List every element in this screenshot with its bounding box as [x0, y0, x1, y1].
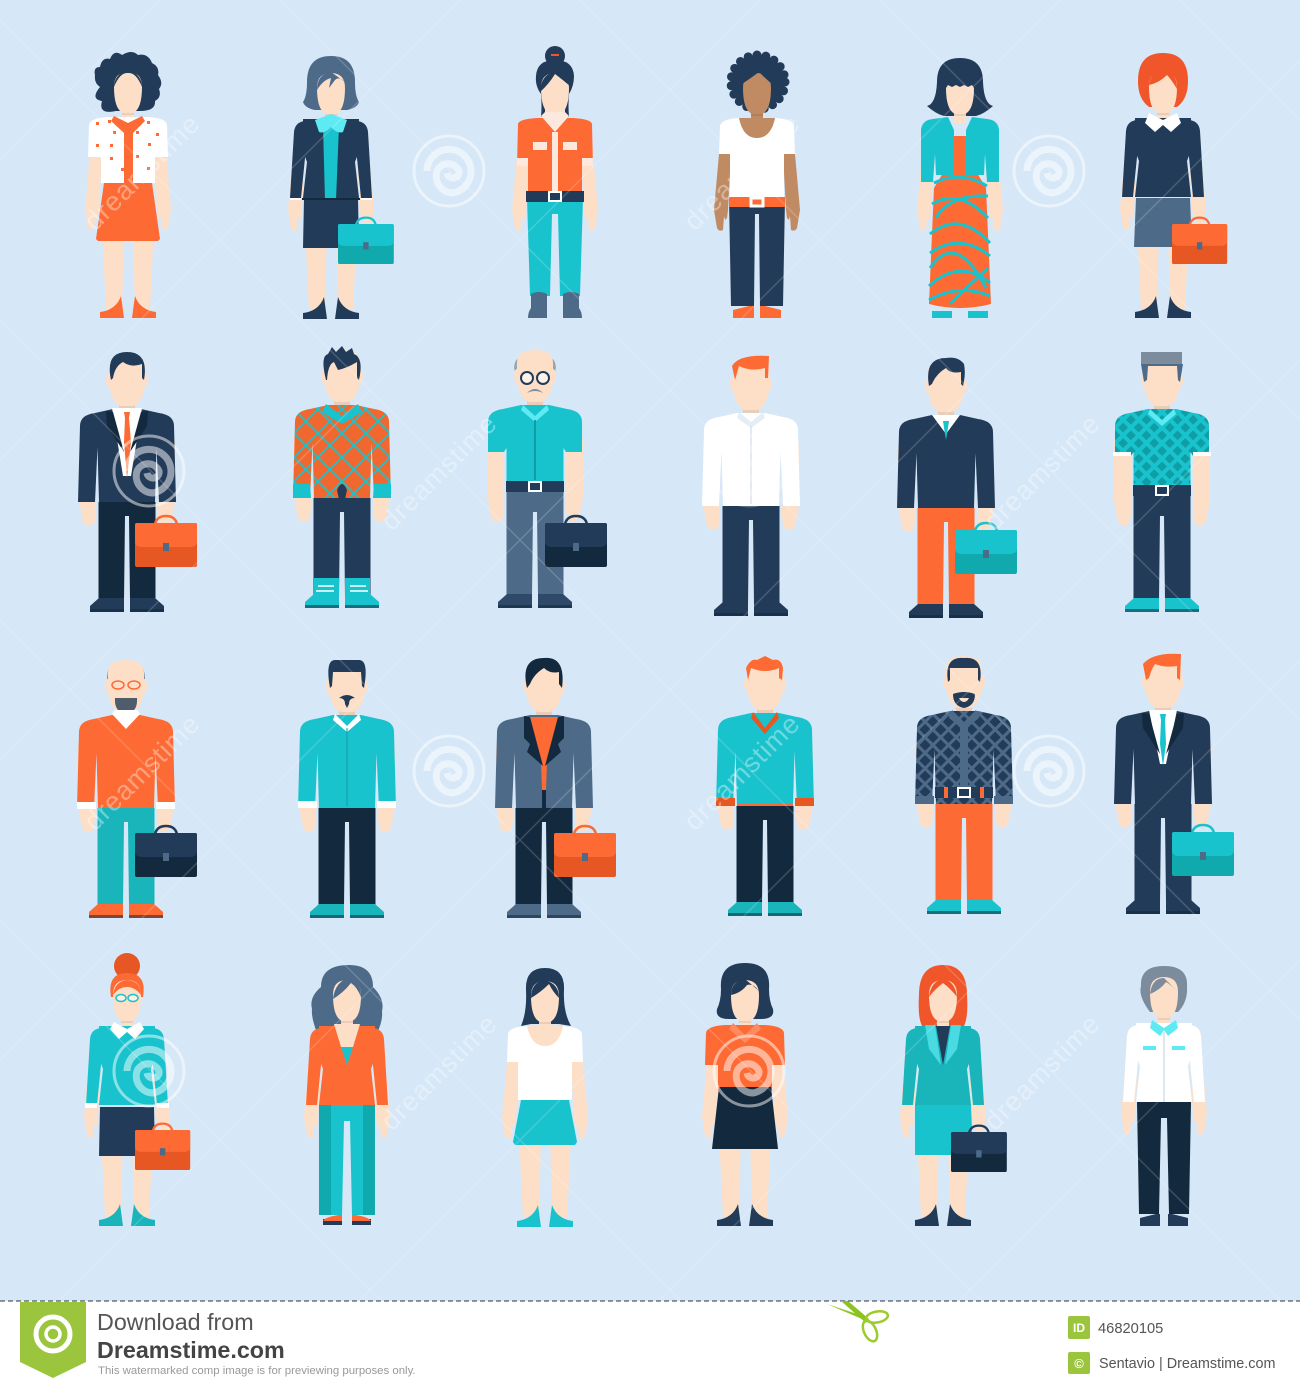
- belt: [729, 197, 785, 207]
- site name: Dreamstime.com: [97, 1337, 285, 1363]
- briefcase: [955, 523, 1017, 574]
- copyright badge: ©: [1074, 1356, 1084, 1371]
- row 1: women: [85, 46, 1227, 319]
- figure: orange-haired man in navy suit with teal bag: [1114, 654, 1234, 914]
- shirt and tie: [112, 408, 142, 476]
- figure: bald bearded man in orange sweater with navy bag: [77, 660, 197, 918]
- row 4: women: [84, 953, 1207, 1227]
- orange skirt: [96, 183, 160, 241]
- glasses: [116, 994, 138, 1002]
- footer: [0, 1301, 1300, 1390]
- figure: orange-haired man in white shirt: [702, 356, 800, 616]
- watermark: spirals, lines and dreamstime text: dreamstime: [678, 108, 806, 236]
- briefcase: [135, 826, 197, 877]
- figure: man in navy sweater and orange pants with teal bag: [897, 358, 1017, 618]
- figure: curly hair woman in polka-dot blouse: [85, 52, 171, 318]
- figure: red-haired woman in navy sweater with orange bag: [1120, 53, 1227, 318]
- briefcase: [135, 1124, 190, 1170]
- briefcase: [338, 218, 394, 264]
- watermark: spirals, lines and dreamstime text: dreamstime: [978, 1008, 1106, 1136]
- figure: bearded man in navy patterned shirt and orange pants: [915, 656, 1013, 914]
- notice: This watermarked comp image is for previewing purposes only.: [98, 1365, 416, 1377]
- figure: woman with orange bun and glasses: [84, 953, 190, 1226]
- lapels: [106, 411, 148, 452]
- row 2: men: [78, 346, 1211, 618]
- watermark: spirals, lines and dreamstime text: dreamstime: [678, 708, 806, 836]
- icon: scissors: [827, 1301, 889, 1344]
- teal skirt: [513, 1100, 577, 1145]
- watermark: spirals, lines and dreamstime text: dreamstime: [78, 108, 206, 236]
- briefcase: [135, 516, 197, 567]
- download heading: Download from: [97, 1309, 254, 1335]
- watermark: spirals, lines and dreamstime text: dreamstime: [978, 408, 1106, 536]
- watermark: spirals, lines and dreamstime text: dreamstime: [375, 1008, 503, 1136]
- belt: [935, 787, 993, 798]
- glasses: [521, 372, 549, 384]
- figure: grey-haired woman in white shirt and black pants: [1121, 966, 1207, 1226]
- id badge: ID: [1073, 1321, 1085, 1335]
- collar and placket: [111, 116, 145, 183]
- figure: man in slate jacket and orange shirt with orange bag: [495, 658, 616, 918]
- blouse: [323, 126, 339, 200]
- figure: wavy-haired woman in orange jacket and teal pants: [304, 965, 390, 1225]
- dress: [929, 136, 991, 308]
- logo badge: [20, 1302, 86, 1378]
- briefcase: [1172, 825, 1234, 876]
- figure: man in plaid shirt with sneakers: [293, 346, 391, 608]
- id badge: [1068, 1316, 1090, 1339]
- figure: dark-haired woman in white tee and teal skirt: [502, 968, 588, 1227]
- briefcase: [1172, 218, 1227, 264]
- figure: older bald man with glasses and navy bag: [487, 350, 607, 608]
- briefcase: [545, 516, 607, 567]
- briefcase: [554, 826, 616, 877]
- watermark: spirals, lines and dreamstime text: dreamstime: [78, 708, 206, 836]
- figure: woman in navy blazer with teal bag: [288, 56, 394, 319]
- figure: afro woman in white tee: [714, 55, 800, 318]
- copyright badge: [1068, 1352, 1090, 1374]
- navy skirt: [712, 1087, 778, 1149]
- row 3: men: [77, 654, 1234, 918]
- figure: woman in patterned orange maxi dress: [917, 58, 1003, 318]
- author credit: Sentavio | Dreamstime.com: [1099, 1356, 1275, 1372]
- figure: orange-haired man in teal sweater: [716, 656, 814, 916]
- id number: 46820105: [1098, 1321, 1163, 1337]
- figure: man in navy suit with orange bag: [78, 352, 197, 612]
- glasses: [112, 681, 140, 689]
- figure: mustached man in teal shirt: [298, 660, 396, 918]
- figure: bob-haired woman in orange top and navy skirt: [702, 963, 788, 1226]
- watermark: spirals, lines and dreamstime text: dreamstime: [375, 408, 503, 536]
- figure: red-haired woman in teal suit with navy bag: [900, 965, 1007, 1226]
- figure: ponytail woman in orange shirt and teal jeans: [512, 46, 598, 318]
- figure: grey-haired man in teal patterned shirt: [1113, 352, 1211, 612]
- briefcase: [951, 1126, 1007, 1172]
